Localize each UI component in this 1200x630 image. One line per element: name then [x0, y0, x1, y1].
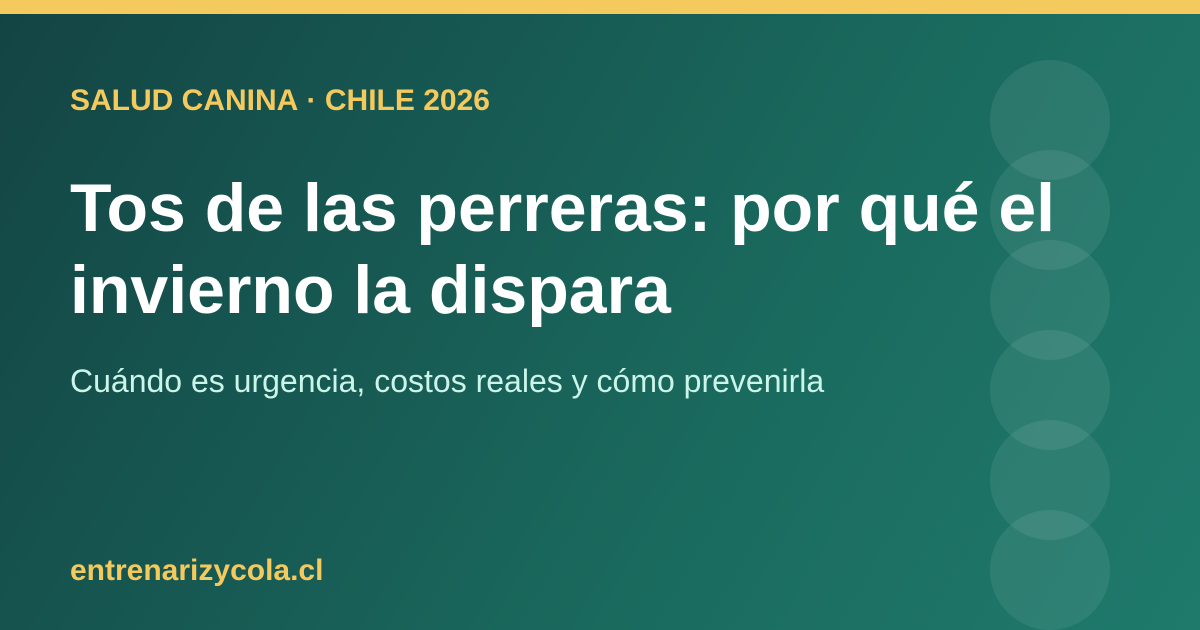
top accent bar [0, 0, 1200, 14]
eyebrow label: SALUD CANINA · CHILE 2026 [70, 84, 490, 117]
website url: entrenarizycola.cl [70, 554, 323, 587]
title: invierno la dispara [70, 252, 671, 328]
decorative circle column [990, 60, 1110, 630]
title [70, 170, 1055, 328]
title: Tos de las perreras: por qué el [70, 170, 1055, 246]
subtitle: Cuándo es urgencia, costos reales y cómo prevenirla [70, 363, 824, 399]
